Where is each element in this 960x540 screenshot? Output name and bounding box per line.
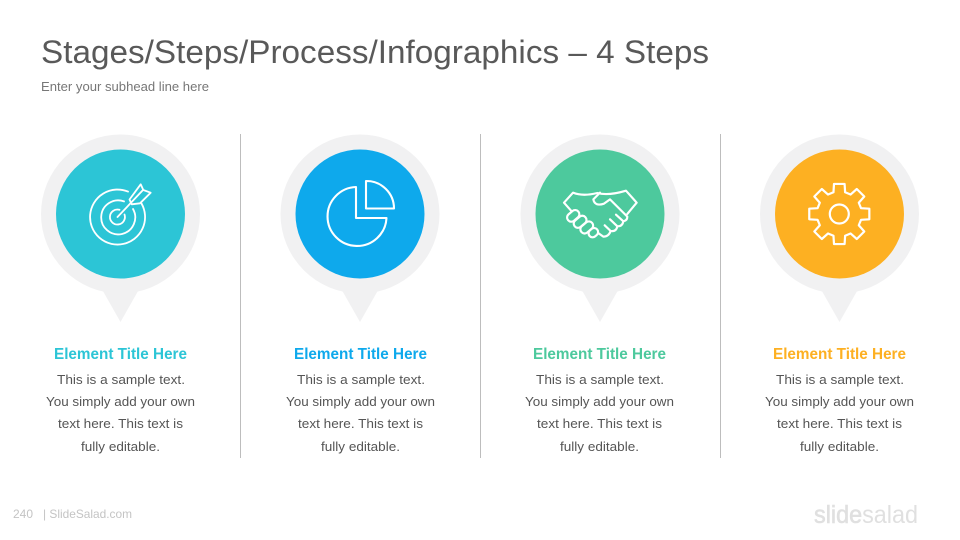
icon: target with arrow — [90, 184, 151, 245]
panel: step 4 — [760, 134, 919, 454]
text block: step 4: fully editable. — [800, 440, 879, 454]
text block: step 4 — [765, 373, 914, 454]
footer: page number: 240 — [13, 507, 33, 521]
text block: step 3: You simply add your own — [525, 395, 674, 409]
text block: step 3: This is a sample text. — [536, 373, 664, 387]
text block: step 2: You simply add your own — [286, 395, 435, 409]
panel: step 2 — [280, 134, 440, 454]
icon: handshake — [564, 191, 637, 239]
heading: step 1: Element Title Here — [54, 346, 187, 363]
text block: step 2: This is a sample text. — [297, 373, 425, 387]
text block: step 1 — [46, 373, 195, 454]
pin: step 3 — [520, 134, 680, 322]
panel: step 1 — [41, 134, 200, 454]
pin: step 2 — [280, 134, 440, 322]
text block: step 3: text here. This text is — [537, 417, 662, 431]
text block: step 3 — [525, 373, 674, 454]
text block: step 4: You simply add your own — [765, 395, 914, 409]
logo: slidesalad: slidesalad — [814, 501, 918, 529]
pin: step 4 — [760, 134, 919, 322]
icon: gear — [809, 184, 869, 244]
text block: step 2: fully editable. — [321, 440, 400, 454]
text block: step 1: fully editable. — [81, 440, 160, 454]
text block: step 1: text here. This text is — [58, 417, 183, 431]
title: Stages/Steps/Process/Infographics – 4 Steps — [41, 34, 709, 70]
panel: step 3 — [520, 134, 680, 454]
text block: step 4: text here. This text is — [777, 417, 902, 431]
heading: step 4: Element Title Here — [773, 346, 906, 363]
subhead: Enter your subhead line here — [41, 80, 209, 94]
footer: source: | SlideSalad.com — [43, 507, 132, 521]
text block: step 2: text here. This text is — [298, 417, 423, 431]
text block: step 1: You simply add your own — [46, 395, 195, 409]
text block: step 3: fully editable. — [560, 440, 639, 454]
text block: step 2 — [286, 373, 435, 454]
heading: step 2: Element Title Here — [294, 346, 427, 363]
heading: step 3: Element Title Here — [533, 346, 666, 363]
pin: step 1 — [41, 134, 200, 322]
text block: step 1: This is a sample text. — [57, 373, 185, 387]
text block: step 4: This is a sample text. — [776, 373, 904, 387]
icon: pie chart — [328, 181, 394, 246]
